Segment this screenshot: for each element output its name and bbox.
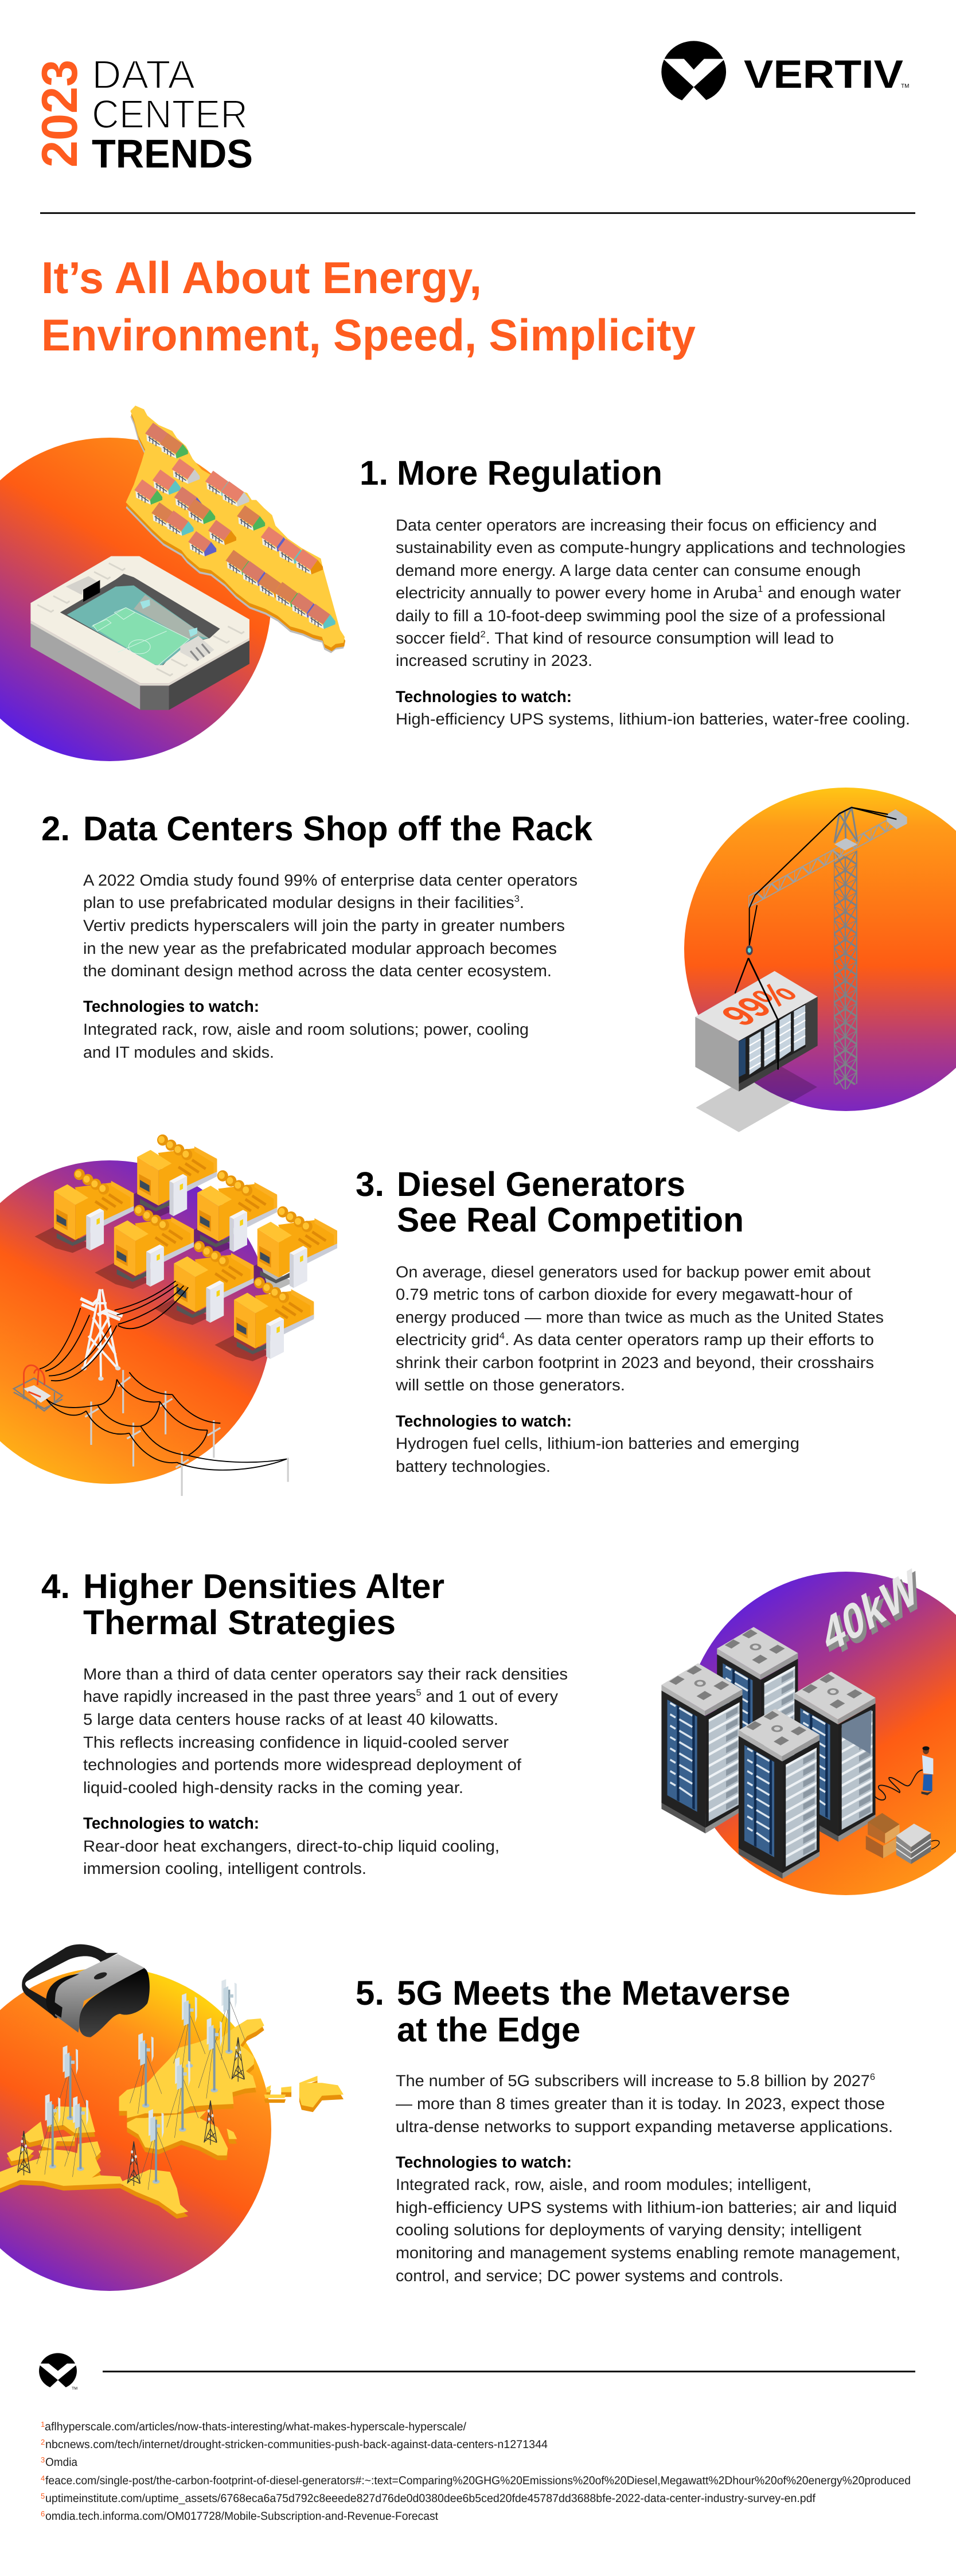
trend 2 text xyxy=(41,809,593,1061)
body text 4: have rapidly increased in the past three years xyxy=(83,1688,407,1705)
technologies to watch 2: Technologies to watch: xyxy=(83,997,259,1015)
lattice towers xyxy=(17,2037,244,2186)
gradient circle xyxy=(0,1160,271,1484)
technologies to watch 3: Hydrogen fuel cells, lithium-ion batteries and emerging xyxy=(396,1435,799,1452)
technologies to watch 4 xyxy=(83,1814,500,1877)
heading 3 xyxy=(356,1165,744,1239)
body text 3: 4 xyxy=(500,1331,505,1341)
gradient circle xyxy=(684,788,956,1111)
body text 5: The number of 5G subscribers will increase to 5.8 billion by 2027 xyxy=(396,2072,856,2090)
footnotes: 5 xyxy=(41,2492,45,2500)
technologies to watch 3: battery technologies. xyxy=(396,1457,551,1475)
title word: data: DATA xyxy=(92,52,195,97)
technologies to watch 4: Rear-door heat exchangers, direct-to-chip liquid cooling, xyxy=(83,1837,500,1855)
server stack xyxy=(896,1823,939,1864)
gradient circle xyxy=(0,1967,271,2291)
footnotes: uptimeinstitute.com/uptime_assets/6768eca6a75d792c8eeede827d76de0d0380dee6b5ced20fde45787dd3688bfe-2022-data-center-industry-survey-en.pdf xyxy=(45,2492,815,2505)
footnotes: omdia.tech.informa.com/OM017728/Mobile-Subscription-and-Revenue-Forecast xyxy=(45,2510,438,2523)
transmission pylon xyxy=(80,1289,123,1381)
technologies to watch 2: and IT modules and skids. xyxy=(83,1043,274,1061)
body text 1: soccer field xyxy=(396,629,477,647)
soccer stadium xyxy=(30,556,249,710)
body text 2: Vertiv predicts hyperscalers will join the party in greater numbers xyxy=(83,917,565,934)
header block xyxy=(31,52,253,176)
5G cell towers xyxy=(37,1979,245,2190)
body text 4: This reflects increasing confidence in liquid-cooled server xyxy=(83,1733,509,1751)
trend 4 text xyxy=(41,1567,568,1877)
technologies to watch 5: high-efficiency UPS systems with lithium-ion batteries; air and liquid xyxy=(396,2199,897,2216)
illustration: stadium and Aruba island xyxy=(0,406,345,761)
technologies to watch 5: control, and service; DC power systems and controls. xyxy=(396,2267,783,2285)
99 percent on module roof: 99% xyxy=(712,977,807,1032)
footnotes: aflhyperscale.com/articles/now-thats-interesting/what-makes-hyperscale-hyperscale/ xyxy=(45,2421,466,2433)
heading 4: 4. xyxy=(41,1567,70,1605)
illustration: world map, 5G towers and VR headset xyxy=(0,1944,344,2291)
body text 4: technologies and portends more widespread deployment of xyxy=(83,1756,521,1774)
footnotes: 6 xyxy=(41,2509,45,2518)
body text 1: Data center operators are increasing their focus on efficiency and xyxy=(396,516,877,534)
body text 4: 5 xyxy=(416,1688,422,1698)
tower crane xyxy=(735,808,907,1090)
body text 4: and 1 out of every xyxy=(422,1688,558,1705)
heading 3: 3. xyxy=(356,1165,384,1203)
body text 2: in the new year as the prefabricated modular approach becomes xyxy=(83,940,557,957)
body text 5 xyxy=(396,2072,893,2135)
technologies to watch 5: monitoring and management systems enabling remote management, xyxy=(396,2244,900,2262)
body text 1: 1 xyxy=(758,584,763,594)
body text 3: shrink their carbon footprint in 2023 and beyond, their crosshairs xyxy=(396,1354,874,1371)
body text 3: will settle on those generators. xyxy=(395,1376,625,1394)
technologies to watch 5: cooling solutions for deployments of varying density; intelligent xyxy=(396,2221,861,2239)
heading 4 xyxy=(41,1567,444,1642)
body text 1: increased scrutiny in 2023. xyxy=(396,652,592,669)
body text 2: the dominant design method across the data center ecosystem. xyxy=(83,962,552,980)
main heading: Environment, Speed, Simplicity xyxy=(41,310,696,360)
footnotes: 2 xyxy=(41,2438,45,2446)
body text 4: liquid-cooled high-density racks in the coming year. xyxy=(83,1779,463,1796)
technologies to watch 3 xyxy=(396,1412,799,1475)
illustration: high density racks xyxy=(661,1558,956,1895)
title word: trends: TRENDS xyxy=(92,131,253,176)
trend 3 text xyxy=(356,1165,884,1475)
body text 4: 5 large data centers house racks of at least 40 kilowatts. xyxy=(83,1710,498,1728)
technologies to watch 1 xyxy=(396,688,910,728)
technologies to watch 5: Integrated rack, row, aisle, and room modules; intelligent, xyxy=(396,2176,811,2193)
body text 3: 0.79 metric tons of carbon dioxide for every megawatt-hour of xyxy=(396,1285,852,1303)
logo mark xyxy=(661,41,726,103)
technologies to watch 2 xyxy=(83,997,529,1061)
body text 1 xyxy=(396,516,906,669)
trademark: TM xyxy=(901,83,909,89)
gradient circle xyxy=(684,1572,956,1895)
technologies to watch 2: Integrated rack, row, aisle and room solutions; power, cooling xyxy=(83,1020,529,1038)
body text 1: 2 xyxy=(480,630,486,640)
body text 2: plan to use prefabricated modular designs in their facilities xyxy=(83,894,497,911)
body text 1: electricity annually to power every home in Aruba xyxy=(396,584,745,602)
technologies to watch 1: High-efficiency UPS systems, lithium-ion batteries, water-free cooling. xyxy=(396,710,910,728)
body text 3: On average, diesel generators used for backup power emit about xyxy=(396,1263,871,1281)
transformer with fence xyxy=(14,1365,63,1411)
body text 3: energy produced — more than twice as much as the United States xyxy=(396,1308,884,1326)
server racks xyxy=(661,1627,876,1879)
body text 3: . As data center operators ramp up their efforts to xyxy=(505,1331,874,1349)
island of Aruba with houses xyxy=(126,406,345,653)
footnotes: 4 xyxy=(41,2474,45,2483)
body text 3 xyxy=(395,1263,884,1394)
body text 5: 6 xyxy=(870,2072,875,2082)
technologies to watch 5: Technologies to watch: xyxy=(396,2153,572,2171)
trend 5 text xyxy=(356,1974,900,2285)
footnotes: 1 xyxy=(41,2420,45,2429)
technologies to watch 5 xyxy=(396,2153,900,2285)
body text 1: sustainability even as compute-hungry applications and technologies xyxy=(396,539,906,556)
footnotes: feace.com/single-post/the-carbon-footprint-of-diesel-generators#:~:text=Comparing%20GHG%20Emissions%20of%20Diesel,Megawatt%2Dhour%20of%20energy%20produced xyxy=(45,2474,911,2487)
footnotes: Omdia xyxy=(45,2456,78,2469)
footer logo mark xyxy=(38,2353,78,2391)
heading 5: at the Edge xyxy=(397,2010,580,2049)
body text 2: A 2022 Omdia study found 99% of enterprise data center operators xyxy=(83,871,577,889)
body text 5: ultra-dense networks to support expanding metaverse applications. xyxy=(396,2118,893,2135)
utility poles xyxy=(85,1370,288,1496)
crane sling xyxy=(748,958,778,1070)
heading 1: More Regulation xyxy=(397,454,662,492)
vertiv logo xyxy=(661,41,909,103)
heading 1: 1. xyxy=(360,454,388,492)
gradient circle xyxy=(0,438,271,761)
technologies to watch 3: Technologies to watch: xyxy=(396,1412,572,1430)
body text 1: daily to fill a 10-foot-deep swimming pool the size of a professional xyxy=(396,607,885,625)
cardboard boxes xyxy=(866,1813,900,1858)
body text 5: — more than 8 times greater than it is today. In 2023, expect those xyxy=(396,2095,885,2113)
body text 1: demand more energy. A large data center can consume enough xyxy=(396,562,861,579)
modular data center box xyxy=(695,971,818,1092)
main heading xyxy=(41,252,696,360)
technician with cable xyxy=(875,1747,933,1800)
body text 2: . xyxy=(520,894,524,911)
heading 5 xyxy=(356,1974,790,2049)
VR headset xyxy=(22,1944,150,2037)
power cables xyxy=(40,1281,287,1470)
body text 1: . That kind of resource consumption will lead to xyxy=(486,629,834,647)
year 2023 vertical: 2023 xyxy=(31,60,88,167)
footnotes: nbcnews.com/tech/internet/drought-stricken-communities-push-back-against-data-centers-n1271344 xyxy=(45,2438,548,2451)
title word: center: CENTER xyxy=(92,92,248,137)
body text 4 xyxy=(83,1665,568,1796)
body text 1: and enough water xyxy=(763,584,901,602)
module shadow xyxy=(696,1062,817,1132)
body text 2: 3 xyxy=(514,894,520,904)
logo wordmark: VERTIV xyxy=(744,52,903,96)
trend 1 text xyxy=(360,454,910,728)
heading 5: 5. xyxy=(356,1974,384,2012)
heading 4: Thermal Strategies xyxy=(83,1603,396,1642)
heading 2: 2. xyxy=(41,809,70,848)
heading 4: Higher Densities Alter xyxy=(83,1567,444,1605)
footnotes: 3 xyxy=(41,2456,45,2464)
technologies to watch 4: immersion cooling, intelligent controls. xyxy=(83,1860,366,1877)
technologies to watch 4: Technologies to watch: xyxy=(83,1814,259,1832)
body text 2 xyxy=(83,871,577,980)
generator sets xyxy=(34,1135,337,1361)
40kW 3D label: 40kW xyxy=(818,1558,923,1664)
heading 2: Data Centers Shop off the Rack xyxy=(83,809,593,848)
heading 5: 5G Meets the Metaverse xyxy=(397,1974,790,2012)
world map xyxy=(0,2018,344,2219)
footnotes xyxy=(41,2420,911,2523)
main heading: It’s All About Energy, xyxy=(41,252,482,303)
illustration: diesel generators and power lines xyxy=(0,1135,337,1496)
heading 3: See Real Competition xyxy=(397,1201,744,1239)
body text 4: More than a third of data center operators say their rack densities xyxy=(83,1665,568,1683)
illustration: crane lifting modular data center xyxy=(684,788,956,1132)
heading 3: Diesel Generators xyxy=(397,1165,685,1203)
footer logo mark: TM xyxy=(72,2387,77,2391)
technologies to watch 1: Technologies to watch: xyxy=(396,688,572,706)
body text 3: electricity grid xyxy=(396,1331,494,1349)
40kW 3D label: 40kW xyxy=(821,1562,926,1668)
